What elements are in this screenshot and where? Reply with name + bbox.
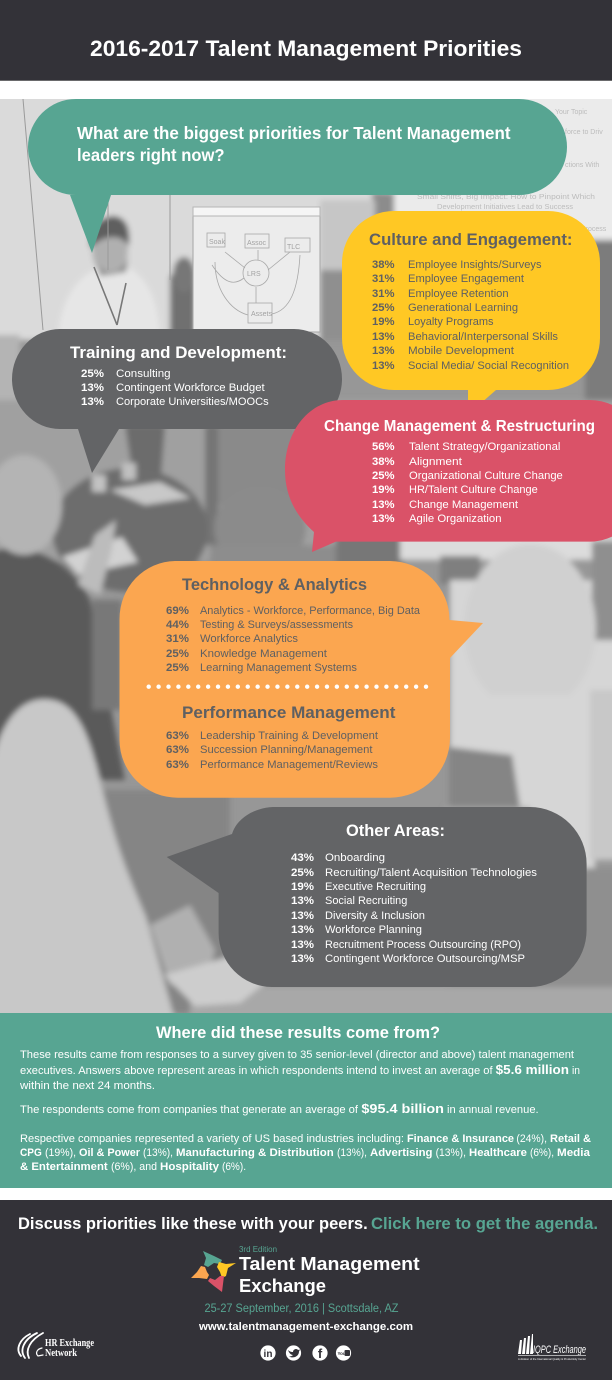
(photo) projected screen text: ctions With <box>565 162 599 169</box>
list: change management: 25% <box>372 470 395 482</box>
paragraph: industries: Oil & Power <box>79 1147 141 1159</box>
(photo) flipchart <box>193 207 320 332</box>
list: change management: HR/Talent Culture Change <box>409 484 538 496</box>
list: change management: Organizational Culture Change <box>409 470 563 482</box>
title: 2016-2017 Talent Management Priorities <box>90 36 522 61</box>
list: training and development: 13% <box>81 396 104 408</box>
logo: IQPC Exchange: A division of the International Quality & Productivity Center <box>518 1357 586 1361</box>
list: other areas: 13% <box>291 910 314 922</box>
icon: youtube: You <box>338 1351 346 1356</box>
icon: facebook <box>312 1345 328 1361</box>
panel: other areas <box>167 807 587 987</box>
paragraph: survey description: within the next 24 months. <box>19 1080 155 1092</box>
question heading <box>77 123 511 165</box>
paragraph: industries: Media <box>557 1147 591 1159</box>
list: performance management: Leadership Training & Development <box>200 730 378 742</box>
list: culture and engagement: Mobile Development <box>408 345 514 357</box>
(photo) flipchart: TLC <box>287 244 300 251</box>
list: culture and engagement: Social Media/ Social Recognition <box>408 360 569 372</box>
paragraph: industries: (6%), and <box>111 1161 157 1173</box>
list: other areas: 13% <box>291 895 314 907</box>
logo: HR Exchange Network: Network <box>45 1347 78 1359</box>
icon: linkedin <box>260 1345 276 1361</box>
list: technology and analytics <box>166 605 421 674</box>
list: other areas: 19% <box>291 881 314 893</box>
paragraph: industries: Retail & <box>550 1133 591 1145</box>
list: performance management <box>166 730 379 771</box>
icon: linkedin: in <box>264 1349 272 1360</box>
list: other areas: 13% <box>291 953 314 965</box>
right woman <box>400 536 612 560</box>
list: performance management: Succession Planning/Management <box>200 744 372 756</box>
(photo) man <box>60 270 158 329</box>
panel: training and development <box>12 329 342 473</box>
(photo) projected screen text: force to Driv <box>565 129 603 136</box>
list: training and development: Contingent Workforce Budget <box>116 382 265 394</box>
list: change management: 38% <box>372 456 395 468</box>
list: performance management: 63% <box>166 759 189 771</box>
paragraph: industries: (24%), <box>516 1133 547 1145</box>
logo: HR Exchange Network <box>18 1333 94 1359</box>
logo: HR Exchange Network: HR Exchange <box>45 1337 94 1349</box>
panel: change management and restructuring <box>285 400 612 552</box>
list: performance management: Performance Management/Reviews <box>200 759 379 771</box>
list: other areas: Recruiting/Talent Acquisition Technologies <box>325 867 538 879</box>
list: change management: Talent Strategy/Organizational <box>409 441 560 453</box>
paragraph: revenue: The respondents come from companies that generate an average of <box>20 1104 359 1116</box>
list: training and development <box>81 368 269 408</box>
list: technology and analytics: Workforce Analytics <box>200 633 299 645</box>
background photo: workshop scene in greyscale <box>0 90 612 1020</box>
list: culture and engagement: 13% <box>372 360 395 372</box>
(photo) flipchart: Soak <box>209 239 225 246</box>
bottom dark floor <box>100 790 230 1013</box>
list: other areas: 13% <box>291 924 314 936</box>
(photo) projected screen text: Development Initiatives Lead to Success <box>437 204 574 211</box>
list: technology and analytics: 44% <box>166 619 189 631</box>
list: other areas: 13% <box>291 939 314 951</box>
paragraph: survey description: $5.6 million <box>496 1062 569 1077</box>
paragraph: industries: Hospitality <box>160 1161 220 1173</box>
icon: event logo star <box>191 1251 236 1292</box>
paragraph: industries <box>20 1133 591 1173</box>
paragraph: industries: Finance & Insurance <box>407 1133 514 1145</box>
panel: where results came from <box>0 1013 612 1188</box>
paragraph: revenue: in annual revenue. <box>447 1104 539 1116</box>
paragraph: industries: (6%). <box>222 1161 246 1173</box>
list: culture and engagement: 19% <box>372 316 395 328</box>
list: change management: 13% <box>372 499 395 511</box>
event name <box>239 1244 420 1296</box>
list: performance management: 63% <box>166 730 189 742</box>
list: training and development: 25% <box>81 368 104 380</box>
list: change management: 13% <box>372 513 395 525</box>
event date and place: 25-27 September, 2016 | Scottsdale, AZ <box>204 1303 398 1315</box>
list: other areas: Onboarding <box>325 852 385 864</box>
speech bubble: question <box>28 99 567 253</box>
list: culture and engagement: Employee Insights/Surveys <box>408 259 542 271</box>
(photo) flipchart: Assoc <box>247 240 267 247</box>
list: culture and engagement: 31% <box>372 273 395 285</box>
list: training and development: 13% <box>81 382 104 394</box>
list: culture and engagement: 38% <box>372 259 395 271</box>
paragraph: industries: (13%), <box>436 1147 466 1159</box>
long-haired woman <box>0 699 175 1020</box>
event name: 3rd Edition <box>239 1244 277 1254</box>
logo: IQPC Exchange <box>518 1334 586 1361</box>
paragraph: survey description: executives. Answers above represent areas in which respondents intend to invest an average of <box>20 1065 494 1077</box>
list: other areas <box>291 852 538 965</box>
(photo) projected screen text: Small Shifts, Big Impact: How to Pinpoint Which <box>417 194 595 201</box>
list: change management: Agile Organization <box>409 513 502 525</box>
list: culture and engagement: Loyalty Programs <box>408 316 494 328</box>
question heading: What are the biggest priorities for Talent Management <box>77 123 511 143</box>
logo: IQPC Exchange: IQPC Exchange <box>533 1344 586 1356</box>
list: other areas: Workforce Planning <box>325 924 422 936</box>
list: technology and analytics: 25% <box>166 648 189 660</box>
paragraph: industries: Manufacturing & Distribution <box>176 1147 334 1159</box>
list: change management: Change Management <box>409 499 518 511</box>
paragraph: revenue: $95.4 billion <box>361 1101 444 1116</box>
paragraph: survey description <box>19 1049 580 1092</box>
(photo) flipchart: LRS <box>247 271 261 278</box>
paragraph: industries: Respective companies represented a variety of US based industries including: <box>20 1133 404 1145</box>
list: other areas: Contingent Workforce Outsourcing/MSP <box>325 953 525 965</box>
panel: culture and engagement <box>342 211 600 404</box>
list: technology and analytics: 31% <box>166 633 189 645</box>
list: other areas: Executive Recruiting <box>325 881 426 893</box>
heading: where did these results come from: Where did these results come from? <box>156 1023 440 1042</box>
list: culture and engagement: Employee Retention <box>408 288 509 300</box>
paragraph: industries: CPG <box>20 1147 42 1159</box>
list: training and development: Consulting <box>116 368 171 380</box>
list: technology and analytics: Analytics - Workforce, Performance, Big Data <box>200 605 421 617</box>
header band <box>0 0 612 81</box>
call to action: Discuss priorities like these with your peers. <box>18 1215 368 1233</box>
heading: culture and engagement: Culture and Engagement: <box>369 230 572 249</box>
dotted divider <box>149 685 427 689</box>
paragraph: industries: (19%), <box>45 1147 76 1159</box>
list: culture and engagement: 13% <box>372 331 395 343</box>
list: technology and analytics: 25% <box>166 662 189 674</box>
event name: Talent Management <box>239 1254 420 1274</box>
list: change management <box>372 441 563 525</box>
paragraph: industries: (13%), <box>143 1147 173 1159</box>
list: culture and engagement: 25% <box>372 302 395 314</box>
list: performance management: 63% <box>166 744 189 756</box>
paragraph: industries: Advertising <box>370 1147 432 1159</box>
paragraph: industries: (6%), <box>530 1147 554 1159</box>
paragraph: survey description: These results came from responses to a survey given to 35 senior-level (director and above) talent management <box>20 1049 574 1061</box>
heading: other areas: Other Areas: <box>346 821 445 840</box>
list: technology and analytics: 69% <box>166 605 189 617</box>
list: change management: 19% <box>372 484 395 496</box>
list: culture and engagement: Behavioral/Interpersonal Skills <box>408 331 559 343</box>
heading: technology and analytics: Technology & Analytics <box>182 575 367 594</box>
list: other areas: 25% <box>291 867 314 879</box>
panel: technology and performance <box>120 561 483 798</box>
carpet and table <box>0 400 612 560</box>
(photo) projected screen text: Process <box>581 226 607 233</box>
list: other areas: Social Recruiting <box>325 895 407 907</box>
list: culture and engagement: Generational Learning <box>408 302 518 314</box>
list: other areas: Recruitment Process Outsourcing (RPO) <box>325 939 521 951</box>
list: culture and engagement <box>372 259 569 372</box>
list: change management: 56% <box>372 441 395 453</box>
icon: facebook: f <box>318 1346 323 1361</box>
call to action: Click here to get the agenda. <box>371 1215 598 1233</box>
footer panel <box>0 1200 612 1380</box>
list: technology and analytics: Learning Management Systems <box>200 662 357 674</box>
heading: performance management: Performance Management <box>182 703 396 722</box>
list: culture and engagement: 13% <box>372 345 395 357</box>
list: technology and analytics: Knowledge Management <box>200 648 327 660</box>
paragraph: industries: (13%), <box>337 1147 367 1159</box>
icon: twitter <box>286 1345 301 1361</box>
(photo) projected screen text <box>417 109 607 233</box>
paragraph: revenue <box>20 1101 539 1116</box>
paragraph: survey description: in <box>572 1065 580 1077</box>
(photo) projected screen text: Your Topic <box>555 109 588 116</box>
event name: Exchange <box>239 1276 326 1296</box>
blonde woman <box>0 549 125 780</box>
heading: training and development: Training and Development: <box>70 343 287 362</box>
(photo) lanyard <box>94 267 126 325</box>
event website: www.talentmanagement-exchange.com <box>198 1321 413 1333</box>
(photo) wall lines <box>23 99 170 330</box>
paragraph: industries: & Entertainment <box>20 1161 108 1173</box>
list: culture and engagement: 31% <box>372 288 395 300</box>
list: technology and analytics: Testing & Surveys/assessments <box>200 619 353 631</box>
question heading: leaders right now? <box>77 145 224 165</box>
icon: youtube <box>336 1345 351 1361</box>
list: other areas: 43% <box>291 852 314 864</box>
(photo) flipchart: Assets <box>251 311 273 318</box>
list: other areas: Diversity & Inclusion <box>325 910 425 922</box>
call to action <box>18 1215 598 1233</box>
list: change management: Alignment <box>409 456 462 468</box>
list: culture and engagement: Employee Engagement <box>408 273 524 285</box>
heading: change management: Change Management & Restructuring <box>324 418 595 435</box>
paragraph: industries: Healthcare <box>469 1147 527 1159</box>
list: training and development: Corporate Universities/MOOCs <box>116 396 269 408</box>
